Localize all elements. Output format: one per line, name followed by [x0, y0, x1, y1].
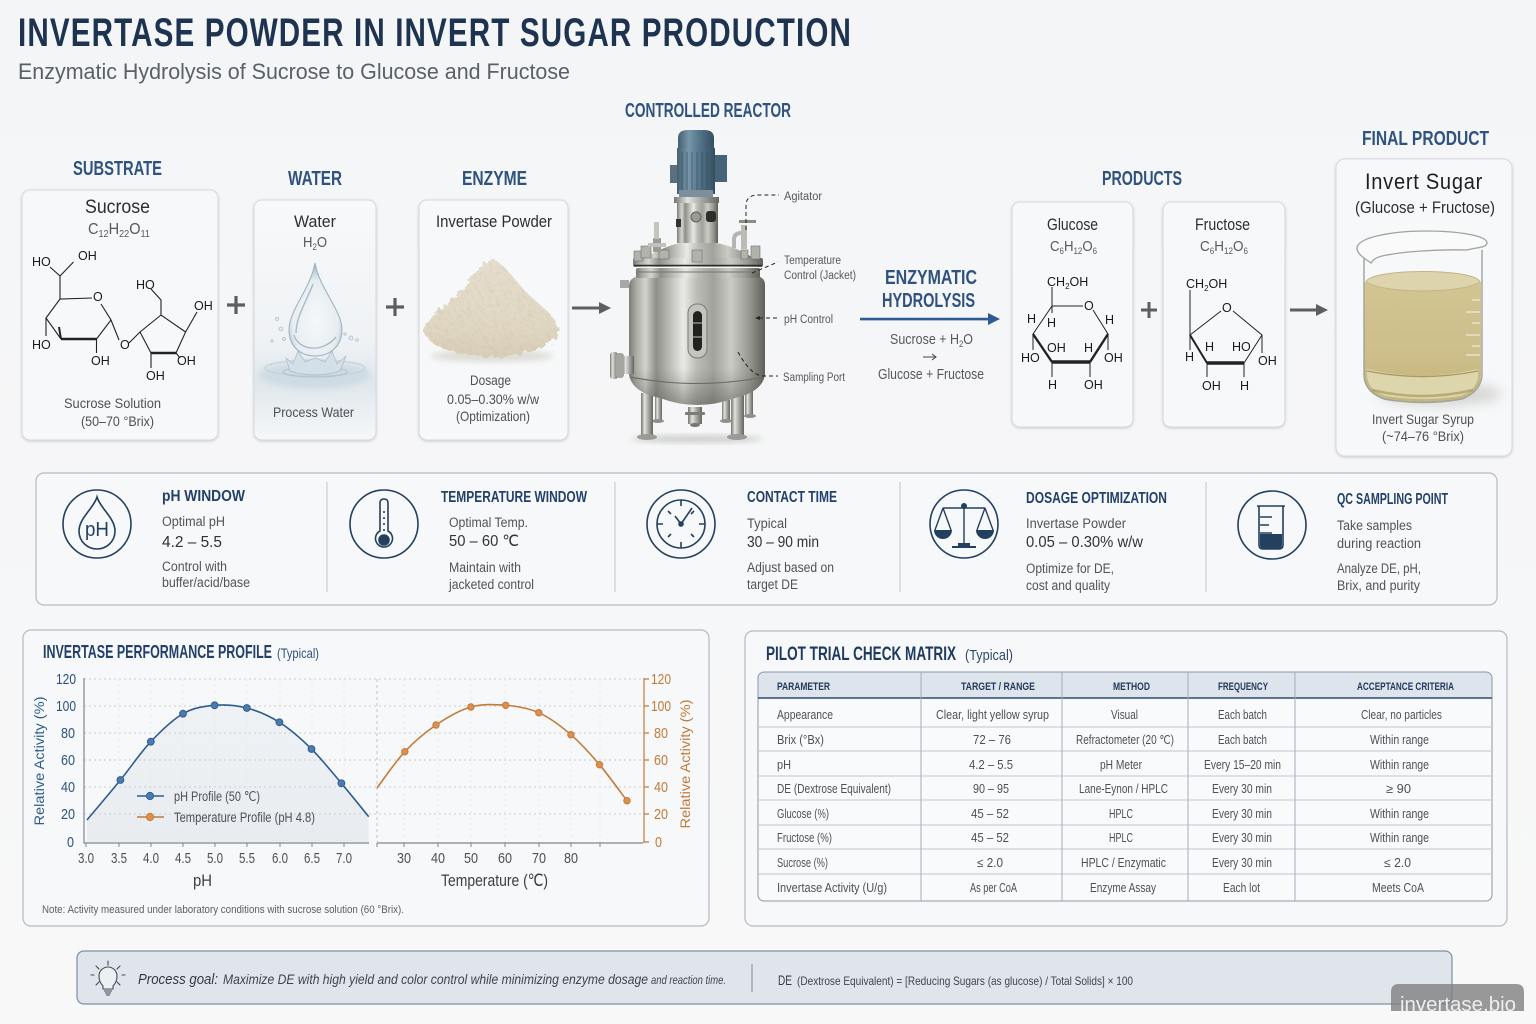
- sucrose molecule: [32, 249, 213, 383]
- arrow head: [599, 302, 611, 314]
- formula: 22: [119, 229, 130, 240]
- row: appearance: Clear, no particles: [1361, 708, 1442, 722]
- glucose molecule: OH: [1104, 351, 1123, 365]
- formula: O: [1233, 238, 1243, 255]
- card title: Fructose: [1195, 216, 1250, 234]
- callout: pH control: [755, 314, 833, 326]
- chart note: Note: Activity measured under laboratory conditions with sucrose solution (60 °Brix).: [42, 904, 404, 916]
- formula: 6: [1243, 246, 1248, 256]
- fructose molecule: H: [1240, 379, 1249, 393]
- sucrose molecule: O: [93, 290, 103, 304]
- fructose molecule: CH: [1186, 277, 1204, 291]
- formula: 2: [312, 242, 317, 252]
- panel: performance profile chart: [23, 630, 709, 926]
- table header row: PARAMETER: [777, 681, 830, 693]
- right axis labels: 40: [654, 779, 668, 796]
- row: appearance: Visual: [1111, 708, 1138, 722]
- right axis labels: [651, 671, 671, 851]
- legend: [137, 789, 315, 825]
- glucose molecule: OH: [1047, 341, 1066, 355]
- right axis labels: 120: [651, 671, 671, 688]
- row: sucrose: Sucrose (%): [777, 856, 828, 870]
- subtitle: Enzymatic Hydrolysis of Sucrose to Glucose and Fructose: [18, 59, 570, 84]
- left axis labels: [56, 671, 76, 851]
- pH curve: [87, 702, 369, 820]
- formula: C: [1050, 238, 1061, 255]
- formula: 6: [1060, 246, 1064, 256]
- dosage caption: Dosage: [470, 372, 511, 388]
- row: DE: Every 30 min: [1212, 782, 1272, 796]
- row: invertase activity: Enzyme Assay: [1090, 881, 1157, 895]
- block: temperature window: jacketed control: [448, 577, 534, 592]
- block: dosage optimization: Invertase Powder: [1026, 516, 1126, 531]
- caption: Process Water: [273, 404, 354, 420]
- caption: Invert Sugar Syrup: [1372, 411, 1474, 427]
- left axis labels: 0: [67, 834, 74, 851]
- x tick labels: 6.5: [304, 850, 320, 867]
- table header row: FREQUENCY: [1218, 681, 1268, 693]
- row: fructose: 45 – 52: [971, 831, 1009, 845]
- formula: O: [129, 221, 141, 238]
- reaction equation: O: [963, 332, 973, 348]
- block: pH window: Control with: [162, 559, 227, 574]
- block: contact time: [747, 489, 837, 592]
- x tick labels: 6.0: [272, 850, 288, 867]
- heading: water: WATER: [288, 168, 342, 190]
- left axis labels: 60: [61, 752, 75, 769]
- sucrose molecule: OH: [91, 354, 110, 368]
- formula: H: [303, 234, 314, 251]
- heading: enzymatic hydrolysis: HYDROLYSIS: [882, 290, 975, 312]
- formula: O: [317, 234, 327, 251]
- watermark: invertase.bio: [1400, 994, 1516, 1016]
- glucose molecule: CH: [1047, 275, 1065, 289]
- formula: O: [1082, 238, 1093, 255]
- block: contact time: Adjust based on: [747, 560, 834, 575]
- panel: pilot trial check matrix: [745, 631, 1507, 926]
- watermark: [1391, 984, 1524, 1016]
- legend: Temperature Profile (pH 4.8): [174, 810, 315, 825]
- heading: enzyme: ENZYME: [462, 168, 527, 190]
- panel: enzyme card: [419, 200, 568, 440]
- fructose molecule: [1185, 277, 1277, 393]
- arrow: [1290, 308, 1318, 312]
- fructose molecule: H: [1205, 340, 1214, 354]
- left axis labels: 40: [61, 779, 75, 796]
- callout: sampling port: [738, 352, 846, 384]
- dosage note: (Optimization): [456, 408, 530, 424]
- row: glucose: [777, 807, 1429, 821]
- block: dosage optimization: [1026, 490, 1167, 593]
- icon: thermometer: [350, 490, 418, 558]
- arrow: [572, 306, 600, 310]
- right axis labels: 0: [655, 834, 662, 851]
- x axis title temperature: Temperature (℃): [441, 871, 548, 890]
- block: pH window: [162, 488, 250, 590]
- heading: final product: FINAL PRODUCT: [1362, 128, 1489, 150]
- callout: temperature control: Temperature: [784, 255, 841, 267]
- temperature curve: [377, 702, 630, 804]
- plus: [227, 296, 245, 314]
- formula: C: [88, 221, 100, 238]
- row: sucrose: [777, 856, 1411, 870]
- row: fructose: Fructose (%): [777, 831, 832, 845]
- row: DE: ≥ 90: [1386, 782, 1411, 796]
- formula: C: [1200, 238, 1211, 255]
- callout: agitator: [746, 191, 822, 230]
- formula: 11: [141, 229, 150, 240]
- DE label: DE: [778, 973, 792, 988]
- sucrose molecule: O: [120, 338, 130, 352]
- icon: light bulb: [91, 961, 125, 995]
- fructose molecule: OH: [1202, 379, 1221, 393]
- x tick labels: 7.0: [336, 850, 352, 867]
- fructose molecule: O: [1222, 301, 1232, 315]
- row: DE: Lane-Eynon / HPLC: [1079, 782, 1168, 796]
- caption: Sucrose Solution: [64, 395, 161, 411]
- row: sucrose: HPLC / Enzymatic: [1081, 856, 1166, 870]
- sucrose molecule: OH: [146, 369, 165, 383]
- left axis labels: 100: [56, 698, 76, 715]
- glucose molecule: H: [1048, 378, 1057, 392]
- sucrose molecule: OH: [177, 354, 196, 368]
- block: temperature window: [441, 489, 588, 592]
- row: DE: [777, 782, 1411, 796]
- line chart: [31, 671, 693, 890]
- row: invertase activity: As per CoA: [970, 881, 1017, 895]
- panel: final product card: [1336, 159, 1512, 456]
- x tick labels: 5.5: [239, 850, 255, 867]
- dosage value: 0.05–0.30% w/w: [447, 391, 540, 407]
- reaction equation: [878, 332, 984, 383]
- table header row: ACCEPTANCE CRITERIA: [1357, 681, 1454, 693]
- block: contact time: CONTACT TIME: [747, 489, 837, 506]
- row: pH: 4.2 – 5.5: [969, 758, 1013, 772]
- row: brix: Refractometer (20 ℃): [1076, 733, 1174, 747]
- row: invertase activity: Meets CoA: [1372, 881, 1425, 895]
- row: sucrose: Every 30 min: [1212, 856, 1272, 870]
- block: pH window: buffer/acid/base: [162, 575, 250, 590]
- left axis labels: 20: [61, 806, 75, 823]
- x tick labels: 4.0: [143, 850, 159, 867]
- formula: 6: [1210, 246, 1214, 256]
- glucose molecule: O: [1084, 299, 1094, 313]
- x tick labels: 5.0: [207, 850, 223, 867]
- fructose molecule: 2: [1204, 284, 1209, 293]
- panel: fructose card: [1163, 202, 1285, 427]
- block: QC sampling point: Analyze DE, pH,: [1337, 561, 1421, 576]
- block: dosage optimization: 0.05 – 0.30% w/w: [1026, 534, 1143, 551]
- plus: [1141, 302, 1157, 318]
- right axis labels: 20: [654, 806, 668, 823]
- glucose molecule: H: [1047, 316, 1056, 330]
- glucose molecule: 2: [1065, 282, 1070, 291]
- x tick labels: 3.0: [78, 850, 94, 867]
- legend: pH Profile (50 ℃): [174, 789, 260, 804]
- panel: water card: [254, 200, 376, 440]
- row: brix: Within range: [1370, 733, 1429, 747]
- right axis title: Relative Activity (%): [677, 700, 693, 828]
- row: appearance: [777, 708, 1442, 722]
- formula: 6: [1093, 246, 1097, 256]
- row: glucose: Glucose (%): [777, 807, 829, 821]
- formula: H: [109, 221, 119, 238]
- reaction equation: Glucose + Fructose: [878, 367, 984, 383]
- block: contact time: target DE: [747, 577, 798, 592]
- row: pH: Every 15–20 min: [1204, 758, 1281, 772]
- row: glucose: HPLC: [1109, 807, 1133, 821]
- block: QC sampling point: during reaction: [1337, 536, 1421, 551]
- caption brix: (50–70 °Brix): [81, 413, 154, 429]
- sucrose molecule: OH: [78, 249, 97, 263]
- row: pH: [777, 758, 1429, 772]
- chart title qualifier: (Typical): [277, 645, 319, 661]
- row: brix: Brix (°Bx): [777, 733, 824, 747]
- icon: balance scale: [930, 490, 998, 558]
- fructose molecule: OH: [1209, 277, 1227, 291]
- block: dosage optimization: cost and quality: [1026, 578, 1110, 593]
- fructose molecule: HO: [1232, 340, 1251, 354]
- callout: pH control: pH Control: [784, 314, 833, 326]
- sucrose molecule: OH: [194, 299, 213, 313]
- icon: water drop: [259, 263, 371, 389]
- row: appearance: Appearance: [777, 708, 833, 722]
- row: brix: [777, 733, 1429, 747]
- block: contact time: Typical: [747, 516, 787, 531]
- card title: Sucrose: [85, 197, 150, 218]
- left axis labels: 120: [56, 671, 76, 688]
- x tick labels: 40: [431, 850, 445, 867]
- icon: clock: [647, 490, 715, 558]
- row: fructose: HPLC: [1109, 831, 1133, 845]
- formula: H: [1214, 238, 1224, 255]
- block: QC sampling point: Brix, and purity: [1337, 578, 1420, 593]
- row: sucrose: ≤ 2.0: [977, 856, 1003, 870]
- row: glucose: Every 30 min: [1212, 807, 1272, 821]
- fructose molecule: H: [1185, 350, 1194, 364]
- row: DE: 90 – 95: [973, 782, 1009, 796]
- formula: 12: [1224, 246, 1233, 256]
- row: fructose: Within range: [1370, 831, 1429, 845]
- block: contact time: 30 – 90 min: [747, 534, 819, 551]
- block: QC sampling point: Take samples: [1337, 518, 1412, 533]
- row: invertase activity: Invertase Activity (U/g): [777, 881, 887, 895]
- table header row: TARGET / RANGE: [961, 681, 1035, 693]
- x tick labels: 80: [564, 850, 578, 867]
- row: fructose: [777, 831, 1429, 845]
- card title: Invert Sugar: [1365, 169, 1483, 194]
- left axis title: Relative Activity (%): [31, 696, 47, 826]
- block: temperature window: TEMPERATURE WINDOW: [441, 489, 588, 506]
- x tick labels: [78, 850, 578, 867]
- panel: process windows: [36, 473, 1497, 605]
- sucrose molecule: HO: [32, 338, 51, 352]
- row: pH: pH: [777, 758, 791, 772]
- sucrose molecule: HO: [136, 278, 155, 292]
- matrix table: [758, 672, 1492, 901]
- process goal statement: Maximize DE with high yield and color control while minimizing enzyme dosage: [223, 972, 648, 987]
- reaction equation: Sucrose + H: [890, 332, 970, 348]
- callout: temperature control: [752, 255, 856, 282]
- row: pH: pH Meter: [1100, 758, 1142, 772]
- block: pH window: Optimal pH: [162, 514, 225, 529]
- callout: agitator: Agitator: [784, 191, 822, 203]
- panel: glucose card: [1012, 202, 1133, 427]
- image: invertase powder pile: [424, 259, 559, 362]
- table header row: METHOD: [1113, 681, 1150, 693]
- glucose molecule: [1021, 275, 1123, 392]
- row: glucose: 45 – 52: [971, 807, 1009, 821]
- block: dosage optimization: Optimize for DE,: [1026, 561, 1114, 576]
- card title: Glucose: [1047, 216, 1098, 234]
- card title: Invertase Powder: [436, 212, 552, 231]
- block: temperature window: Optimal Temp.: [449, 515, 528, 530]
- banner: process goal: [77, 951, 1452, 1004]
- reaction equation: 2: [959, 339, 963, 349]
- glucose molecule: OH: [1084, 378, 1103, 392]
- row: brix: Each batch: [1218, 733, 1267, 747]
- plus: [386, 298, 404, 316]
- x tick labels: 30: [397, 850, 411, 867]
- heading: controlled reactor: CONTROLLED REACTOR: [625, 100, 791, 122]
- heading: enzymatic hydrolysis: [882, 267, 977, 312]
- row: appearance: Clear, light yellow syrup: [936, 708, 1049, 722]
- row: appearance: Each batch: [1218, 708, 1267, 722]
- glucose molecule: H: [1027, 312, 1036, 326]
- DE formula: (Dextrose Equivalent) = [Reducing Sugars (as glucose) / Total Solids] × 100: [797, 974, 1133, 988]
- block: pH window: pH WINDOW: [162, 488, 246, 505]
- heading: products: PRODUCTS: [1102, 168, 1182, 190]
- table header row: [777, 681, 1454, 693]
- process goal statement end: and reaction time.: [651, 975, 726, 987]
- block: temperature window: Maintain with: [449, 560, 521, 575]
- right axis labels: 80: [654, 725, 668, 742]
- formula: 12: [99, 229, 109, 240]
- block: QC sampling point: QC SAMPLING POINT: [1337, 491, 1448, 508]
- x axis title pH: pH: [193, 871, 212, 890]
- row: pH: Within range: [1370, 758, 1429, 772]
- image: beaker of invert sugar syrup: [1357, 231, 1502, 406]
- caption brix: (~74–76 °Brix): [1382, 428, 1464, 444]
- chart title: INVERTASE PERFORMANCE PROFILE: [43, 642, 272, 662]
- row: fructose: Every 30 min: [1212, 831, 1272, 845]
- illustration: stainless steel reactor: [610, 130, 765, 443]
- row: brix: 72 – 76: [973, 733, 1011, 747]
- glucose molecule: OH: [1070, 275, 1088, 289]
- card title: Water: [294, 212, 336, 231]
- x tick labels: 60: [498, 850, 512, 867]
- row: invertase activity: Each lot: [1223, 881, 1260, 895]
- x tick labels: 4.5: [175, 850, 191, 867]
- glucose molecule: H: [1105, 313, 1114, 327]
- formula: 12: [1074, 246, 1082, 256]
- block: temperature window: 50 – 60 ℃: [449, 533, 519, 550]
- icon: pH drop: [63, 490, 131, 558]
- arrow: reaction: [860, 313, 1000, 325]
- row: sucrose: ≤ 2.0: [1384, 856, 1411, 870]
- right axis labels: 60: [654, 752, 668, 769]
- row: DE: DE (Dextrose Equivalent): [777, 782, 891, 796]
- block: QC sampling point: [1337, 491, 1448, 593]
- callout: temperature control: Control (Jacket): [784, 270, 856, 282]
- process goal label: Process goal:: [138, 972, 218, 988]
- icon: sample beaker: [1238, 491, 1306, 559]
- fructose molecule: OH: [1258, 354, 1277, 368]
- right axis labels: 100: [651, 698, 671, 715]
- glucose molecule: H: [1084, 341, 1093, 355]
- row: invertase activity: [777, 881, 1425, 895]
- callout: sampling port: Sampling Port: [783, 372, 846, 384]
- block: dosage optimization: DOSAGE OPTIMIZATION: [1026, 490, 1167, 507]
- block: pH window: 4.2 – 5.5: [162, 534, 222, 551]
- formula: H: [1064, 238, 1074, 255]
- table title qualifier: (Typical): [965, 647, 1013, 664]
- arrow head: [1316, 304, 1328, 316]
- x tick labels: 70: [532, 850, 546, 867]
- x tick labels: 3.5: [111, 850, 127, 867]
- row: glucose: Within range: [1370, 807, 1429, 821]
- title: INVERTASE POWDER IN INVERT SUGAR PRODUCTION: [18, 11, 852, 55]
- panel: sucrose card: [22, 190, 218, 440]
- glucose molecule: HO: [1021, 351, 1040, 365]
- left axis labels: 80: [61, 725, 75, 742]
- sucrose molecule: HO: [32, 255, 51, 269]
- heading: enzymatic hydrolysis: ENZYMATIC: [885, 267, 977, 289]
- table title: PILOT TRIAL CHECK MATRIX: [766, 644, 956, 665]
- x tick labels: 50: [464, 850, 478, 867]
- heading: substrate: SUBSTRATE: [73, 158, 162, 180]
- icon: pH drop: pH: [85, 519, 109, 541]
- card subtitle: (Glucose + Fructose): [1355, 198, 1495, 217]
